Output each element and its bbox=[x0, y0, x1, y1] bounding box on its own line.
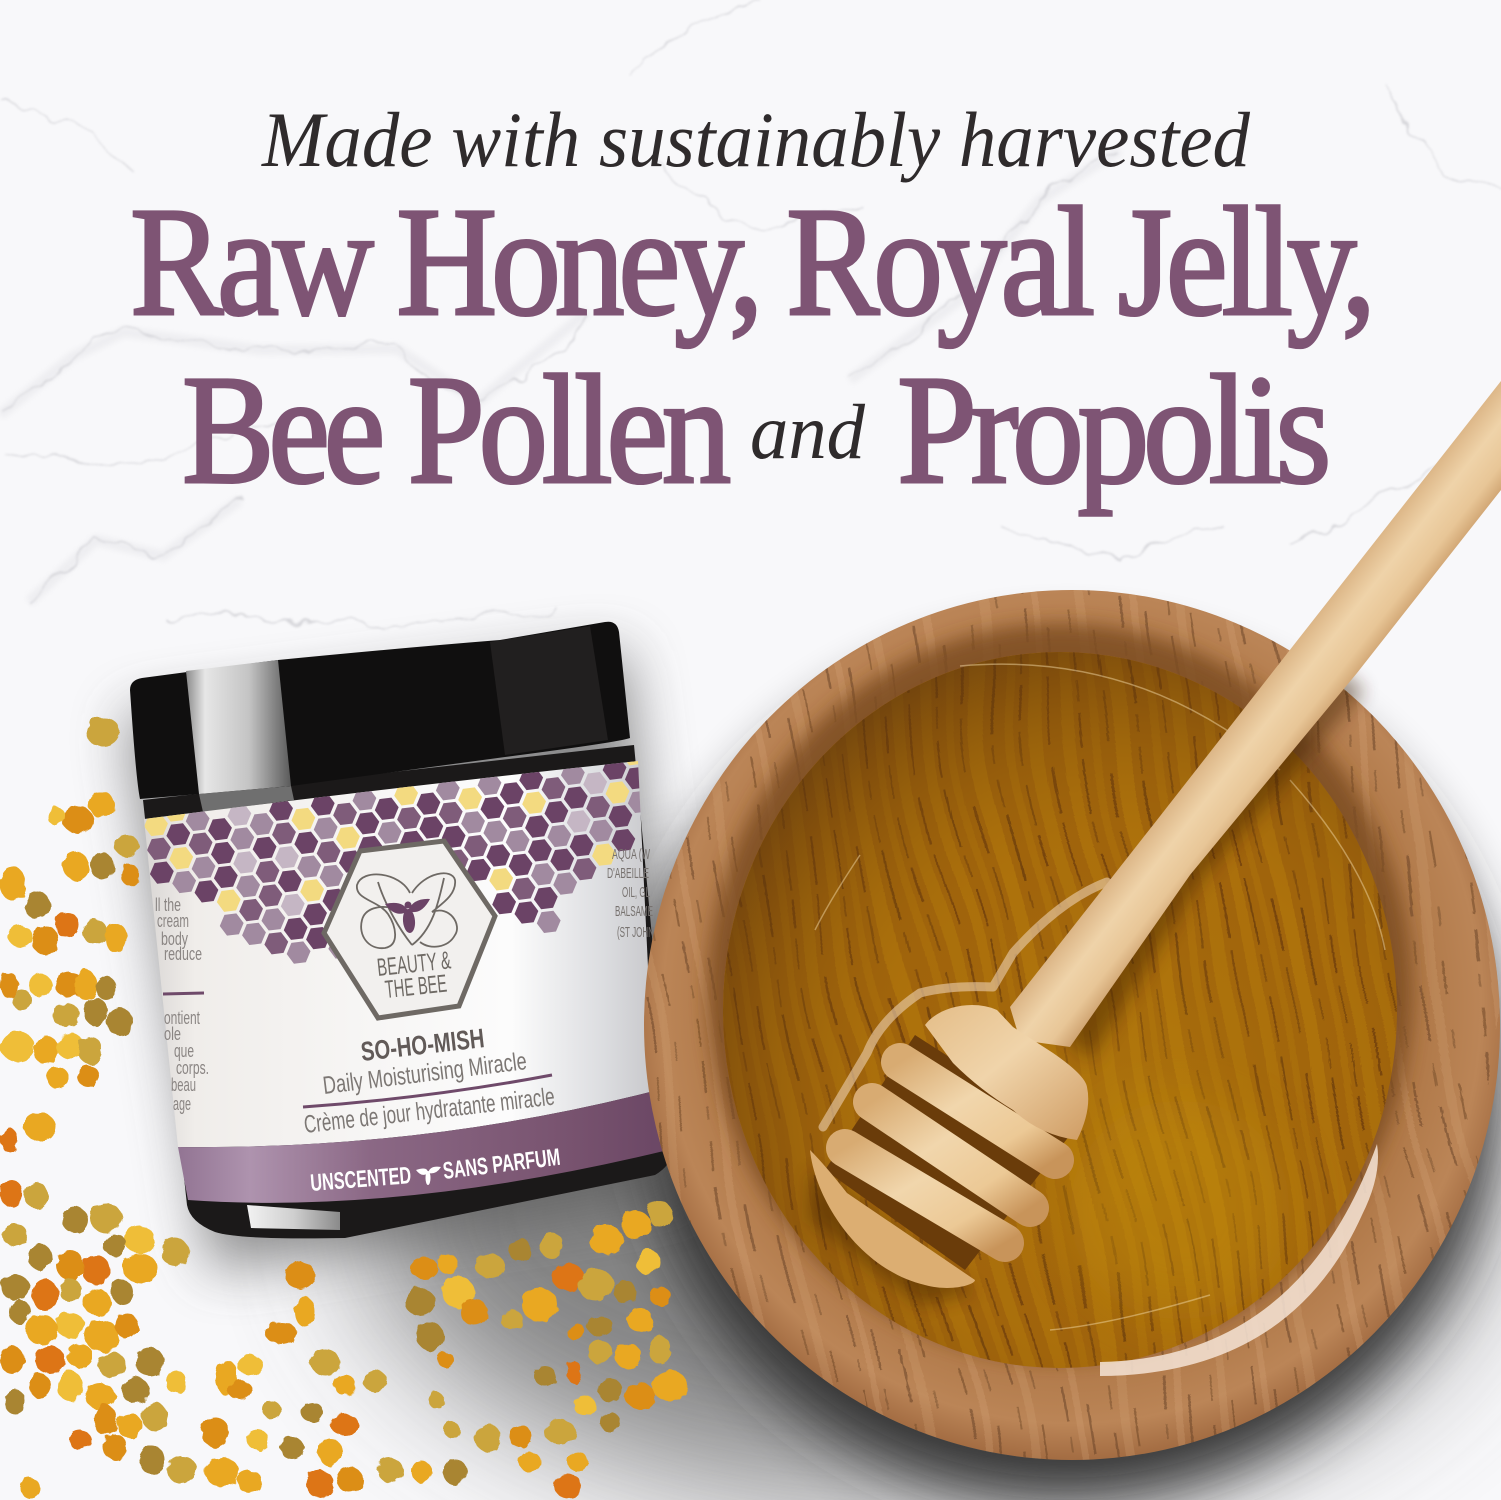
side text: left: beau bbox=[171, 1075, 196, 1095]
jar label bbox=[141, 742, 668, 1203]
honeycomb pattern bbox=[144, 761, 640, 964]
honey dipper bbox=[810, 381, 1501, 1305]
title line: raw honey, royal jelly: Raw Honey, Royal Jelly, bbox=[130, 175, 1370, 348]
label rule bbox=[303, 1075, 552, 1107]
logo monogram BB bbox=[357, 873, 457, 948]
lid sheen right bbox=[490, 626, 608, 755]
jar lid bbox=[130, 622, 630, 799]
bowl inner wall bbox=[708, 624, 1412, 1360]
side text: ingredients: OIL, GL bbox=[622, 884, 650, 901]
title line: bee pollen: Bee Pollen bbox=[182, 343, 729, 516]
title word: propolis: Propolis bbox=[897, 343, 1327, 516]
jar base highlight bbox=[247, 1205, 340, 1230]
logo hexagon bbox=[324, 841, 495, 1018]
side text: left: ole bbox=[164, 1024, 181, 1044]
band text: sans parfum: SANS PARFUM bbox=[441, 1144, 562, 1185]
dipper head bbox=[810, 1005, 1088, 1288]
side text: ingredients: AQUA (W bbox=[612, 846, 650, 863]
label paper bbox=[144, 761, 654, 1147]
side text: left: corps. bbox=[176, 1058, 209, 1078]
side rule bbox=[163, 993, 204, 994]
side text: left: que bbox=[174, 1041, 194, 1061]
honey edge highlight bbox=[1100, 1144, 1378, 1376]
dipper handle bbox=[1010, 381, 1501, 1047]
side text: left: reduce bbox=[164, 944, 202, 964]
dipper bottom dome bbox=[810, 1150, 975, 1288]
purple band bbox=[178, 1091, 668, 1203]
dipper core bbox=[825, 1035, 1070, 1270]
side text: left: cream bbox=[157, 911, 189, 931]
product description english: Daily Moisturising Miracle bbox=[321, 1047, 528, 1100]
side text: ingredients: BALSAME bbox=[615, 903, 653, 920]
product description french: Crème de jour hydratante miracle bbox=[303, 1083, 556, 1139]
logo bee bbox=[385, 899, 430, 933]
logo text: BEAUTY & bbox=[376, 946, 452, 982]
lid highlight bbox=[186, 660, 291, 794]
jar body bbox=[143, 745, 672, 1238]
bee pollen granules bbox=[0, 717, 688, 1498]
title bbox=[130, 96, 1370, 516]
side text: ingredients: (ST JOHN bbox=[617, 924, 654, 941]
side text: left: age bbox=[173, 1094, 191, 1114]
bowl wood grain bbox=[646, 590, 1500, 1460]
wooden bowl bbox=[644, 590, 1500, 1460]
honey bbox=[723, 652, 1397, 1368]
dipper top dome bbox=[925, 1005, 1088, 1140]
shadow: jar and bowl bbox=[125, 644, 1500, 1500]
side text: left bbox=[155, 895, 209, 1114]
logo text bbox=[376, 946, 452, 1004]
band icon: bee bbox=[416, 1167, 441, 1185]
product name: SO-HO-MISH bbox=[359, 1023, 486, 1067]
title word: and: and bbox=[750, 388, 866, 475]
side text: left: ll the bbox=[155, 895, 181, 915]
dipper honey film bbox=[823, 882, 1107, 1127]
dipper ridges bbox=[845, 1062, 1055, 1243]
side text: left: ontient bbox=[164, 1008, 200, 1028]
jar neck highlight bbox=[199, 786, 294, 812]
side text: ingredients: D'ABEILLE bbox=[607, 865, 649, 882]
logo text: THE BEE bbox=[384, 970, 448, 1004]
title line: made with sustainably harvested: Made with sustainably harvested bbox=[261, 96, 1251, 183]
product jar bbox=[130, 622, 672, 1238]
bowl outer bbox=[644, 590, 1500, 1460]
side text: ingredients bbox=[607, 846, 654, 941]
honey surface lines bbox=[815, 664, 1385, 1330]
band text: unscented: UNSCENTED bbox=[309, 1162, 412, 1197]
side text: left: body bbox=[161, 929, 188, 949]
dipper shadow bbox=[810, 670, 1365, 1305]
